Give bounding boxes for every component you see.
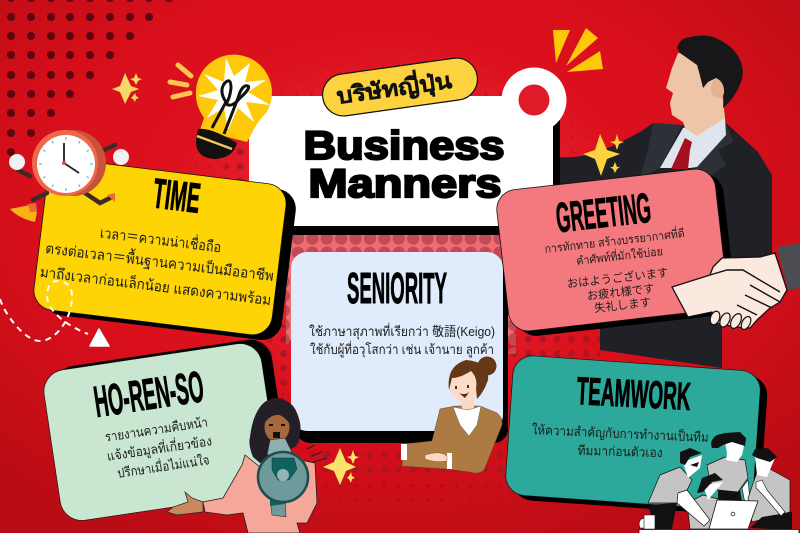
text: greeting body bbox=[544, 225, 685, 315]
illustration: handshake bbox=[672, 243, 800, 331]
face bbox=[264, 412, 290, 442]
back woman bbox=[718, 490, 742, 502]
megaphone handle bbox=[267, 438, 292, 455]
icon: running clock bbox=[9, 130, 129, 222]
face bbox=[449, 366, 479, 402]
text: ho-ren-so body: ปรีกษาเมื่อไม่แน่ใจ bbox=[116, 451, 210, 481]
illustration: office woman bbox=[401, 356, 502, 473]
hair bbox=[249, 398, 301, 463]
photo: businessman bbox=[540, 36, 772, 368]
laptop bbox=[709, 500, 758, 529]
text: greeting body: おはようございます bbox=[566, 265, 669, 291]
title panel shadow bbox=[258, 120, 560, 235]
yellow burst bbox=[553, 28, 603, 72]
hair bbox=[677, 36, 743, 108]
panel: title bbox=[249, 96, 553, 226]
hand bbox=[167, 492, 203, 515]
text: time body bbox=[39, 223, 275, 309]
text: teamwork body: ให้ความสำคัญกับการทำงานเป็นทีม bbox=[531, 420, 709, 445]
icon: light bulb bbox=[170, 55, 272, 159]
icon: sparkles lower bbox=[323, 448, 359, 485]
collar bbox=[453, 406, 481, 436]
panel: seniority shadow bbox=[296, 262, 508, 443]
shirt collar bbox=[660, 118, 726, 168]
icon: sparkles near man bbox=[583, 134, 624, 176]
text: teamwork body bbox=[531, 420, 709, 460]
panel: time bbox=[32, 157, 288, 337]
title: Business Manners bbox=[304, 124, 504, 206]
megaphone horn bbox=[258, 452, 308, 502]
panel: ho-ren-so: HO-REN-SO bbox=[91, 362, 207, 427]
eyes and smile bbox=[455, 385, 470, 398]
hair bun bbox=[478, 356, 496, 376]
illustration: team bbox=[639, 432, 799, 533]
left person bbox=[648, 503, 677, 529]
icon: Japan flag circle bbox=[502, 68, 566, 132]
title: Business Manners: Business bbox=[304, 124, 504, 168]
panel: greeting shadow bbox=[503, 172, 737, 338]
table bbox=[639, 530, 799, 533]
halftone glow behind title bbox=[194, 64, 600, 516]
arrow: dashed path bbox=[0, 281, 109, 346]
fringe bbox=[264, 409, 290, 424]
bulb glow rays bbox=[198, 58, 270, 130]
sleeve bbox=[777, 243, 800, 290]
cuffs and hand bbox=[401, 444, 407, 460]
panel: time: TIME bbox=[151, 169, 203, 222]
text: time body: มาถึงเวลาก่อนเล็กน้อย แสดงความพร้อม bbox=[39, 262, 272, 309]
panel: seniority: SENIORITY bbox=[347, 264, 447, 313]
panel: ho-ren-so shadow bbox=[51, 337, 291, 517]
fingers bbox=[708, 310, 753, 331]
text: time body: ตรงต่อเวลา＝พื้นฐานความเป็นมืออาชีพ bbox=[44, 237, 275, 285]
text: greeting body: お疲れ様です bbox=[586, 281, 655, 303]
hair bbox=[449, 360, 488, 399]
middle person bbox=[687, 495, 722, 529]
lapels bbox=[640, 123, 733, 190]
panel: time shadow bbox=[41, 162, 298, 342]
panel: seniority bbox=[291, 252, 503, 431]
text: seniority body bbox=[309, 323, 495, 358]
panel: greeting bbox=[495, 167, 729, 333]
panel: ho-ren-so bbox=[41, 341, 281, 523]
title: Business Manners: Manners bbox=[308, 162, 502, 206]
text: ho-ren-so body: รายงานความคืบหน้า bbox=[104, 414, 209, 445]
text: time body: เวลา＝ความน่าเชื่อถือ bbox=[99, 223, 222, 256]
text: greeting body: 失礼します bbox=[593, 295, 652, 315]
hands bbox=[672, 253, 787, 328]
bulb base bbox=[196, 129, 237, 159]
text: ho-ren-so body: แจ้งข้อมูลที่เกี่ยวข้อง bbox=[106, 432, 213, 465]
label pill: company bbox=[320, 55, 480, 119]
neck bbox=[461, 392, 474, 410]
body bbox=[203, 455, 317, 533]
text: seniority body: ใช้กับผู้ที่อวุโสกว่า เช่น เจ้านาย ลูกค้า bbox=[310, 341, 494, 358]
rays bbox=[170, 65, 191, 97]
right person bbox=[748, 468, 790, 522]
icon: sparkles left bbox=[112, 73, 142, 104]
body bbox=[402, 406, 502, 473]
panel: greeting: GREETING bbox=[554, 184, 653, 241]
suit body bbox=[540, 123, 772, 368]
dot pattern: top left bbox=[7, 0, 173, 156]
text: teamwork body: ทีมมาก่อนตัวเอง bbox=[577, 443, 663, 460]
filament bbox=[212, 81, 249, 134]
megaphone grip bbox=[270, 495, 286, 517]
panel: teamwork bbox=[504, 355, 762, 511]
knuckle lines bbox=[710, 270, 780, 315]
text: seniority body: ใช้ภาษาสุภาพที่เรียกว่า 敬語(Keigo) bbox=[309, 323, 495, 340]
red tie bbox=[671, 138, 692, 169]
label pill: company: บริษัทญี่ปุ่น bbox=[334, 64, 454, 111]
ear bbox=[711, 78, 725, 98]
text: greeting body: การทักทาย สร้างบรรยากาศที่ดี bbox=[544, 225, 685, 256]
eyes and mouth bbox=[269, 424, 285, 438]
text: ho-ren-so body bbox=[104, 414, 213, 481]
illustration: woman with megaphone bbox=[167, 398, 327, 533]
pink halftone panel bbox=[286, 230, 516, 354]
left person's arm bbox=[677, 490, 710, 526]
sound lines bbox=[307, 445, 327, 462]
mug bbox=[639, 515, 655, 529]
panel: teamwork shadow bbox=[511, 360, 769, 516]
text: greeting body: คำศัพท์ที่มักใช้บ่อย bbox=[575, 243, 664, 268]
neck and face bbox=[666, 53, 725, 136]
